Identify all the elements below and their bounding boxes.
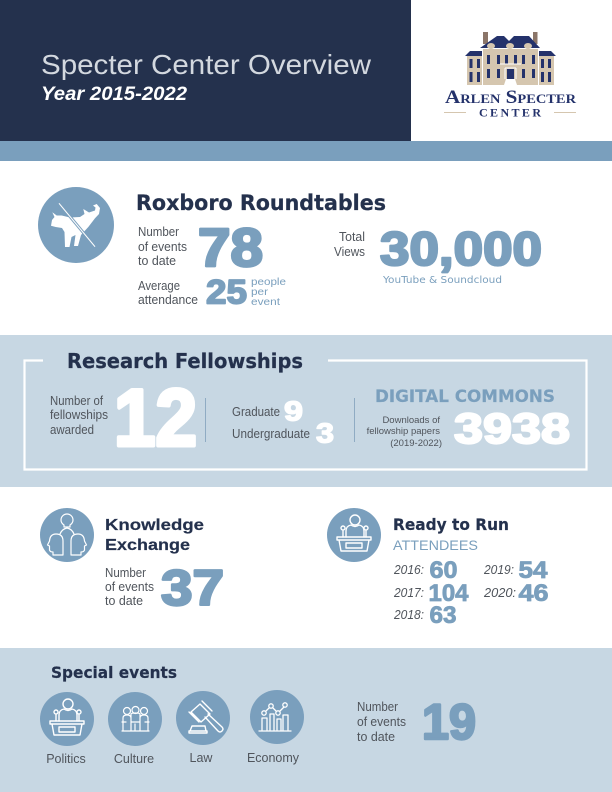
text: people per event: event	[251, 297, 280, 308]
logo: Arlen Specter Center: CENTER	[479, 106, 541, 120]
text: people per event	[251, 277, 287, 308]
text: YouTube and Soundcloud: YouTube & Soundcloud	[382, 275, 502, 286]
attendees by year: 46	[518, 580, 548, 607]
text: number of events: to date	[138, 254, 176, 268]
heading: Knowledge Exchange	[105, 517, 204, 554]
number: 25 attendance: 25	[206, 274, 247, 312]
number: 30,000 views: 30,000	[380, 222, 542, 275]
icon: economy chart	[250, 690, 304, 744]
text: number of fellowships awarded	[50, 394, 108, 437]
text: total views: Total	[339, 230, 365, 244]
text: number of events: Number	[105, 566, 146, 580]
text: number of fellowships awarded: awarded	[50, 423, 94, 437]
number: 19 events: 19	[422, 694, 476, 750]
heading: Roxboro Roundtables: Roxboro Roundtables	[136, 191, 386, 215]
text: total views: Views	[334, 245, 365, 259]
panel: Knowledge Exchange	[40, 508, 224, 616]
text: number of fellowships awarded: fellowships	[50, 408, 108, 422]
heading: Knowledge Exchange: Knowledge	[105, 517, 204, 534]
heading: Knowledge Exchange: Exchange	[105, 537, 190, 554]
heading: Ready to Run: Ready to Run	[393, 515, 509, 534]
text: number of events: of events	[138, 240, 187, 254]
attendees by year: 104	[428, 580, 469, 607]
attendees by year: 2018:	[393, 607, 424, 622]
logo: Arlen Specter Center: Arlen Specter	[445, 87, 577, 108]
attendees by year: 60	[430, 557, 458, 584]
title: Specter Center Overview	[41, 49, 372, 80]
label: politics: Politics	[46, 752, 86, 766]
text: average attendance	[138, 279, 198, 307]
number: 12 fellowships: 12	[114, 374, 197, 464]
text: number of events: of events	[105, 580, 154, 594]
attendees by year: 2017:	[393, 585, 424, 600]
text: number of events: to date	[105, 594, 143, 608]
text: average attendance: attendance	[138, 293, 198, 307]
text: number of events: of events	[357, 715, 406, 729]
panel: Special events	[0, 648, 612, 792]
text: total views	[334, 230, 365, 259]
label: culture: Culture	[114, 752, 154, 766]
icon: two heads and lightbulb	[40, 508, 94, 562]
text: downloads of fellowship papers: Downloads of	[382, 415, 440, 426]
heading: Special events: Special events	[51, 663, 177, 682]
text: undergraduate: Undergraduate	[232, 427, 310, 441]
number: 78 events: 78	[198, 218, 263, 278]
attendees by year	[393, 557, 548, 629]
subtitle: Year 2015-2022	[41, 84, 187, 105]
text: people per event: people	[251, 277, 287, 288]
top accent band	[0, 141, 612, 161]
text: people per event: per	[251, 287, 269, 298]
text: number of events	[138, 225, 187, 268]
text: average attendance: Average	[138, 279, 180, 293]
header panel	[0, 0, 411, 141]
text: number of events	[105, 566, 154, 608]
heading: Research Fellowships: Research Fellowships	[67, 349, 303, 373]
number: 9 graduate: 9	[284, 396, 303, 426]
text: graduate: Graduate	[232, 405, 280, 419]
text: number of events: Number	[357, 700, 398, 714]
number: 3938 downloads: 3938	[454, 405, 570, 453]
text: downloads of fellowship papers	[367, 415, 442, 449]
icon: law gavel	[176, 691, 230, 745]
number: 37 events: 37	[161, 560, 224, 616]
icon: culture	[108, 692, 162, 746]
text: downloads of fellowship papers: (2019-2022)	[390, 438, 442, 449]
attendees by year: 2019:	[483, 562, 514, 577]
text: number of fellowships awarded: Number of	[50, 394, 103, 408]
subheading: attendees: ATTENDEES	[393, 537, 478, 553]
panel: Research Fellowships	[0, 335, 612, 487]
icon: crossed-out donkey	[38, 187, 114, 263]
icon: politics	[40, 692, 94, 746]
text: downloads of fellowship papers: fellowship papers	[367, 426, 440, 437]
label: law: Law	[190, 751, 213, 765]
attendees by year: 63	[430, 602, 456, 629]
text: number of events: Number	[138, 225, 179, 239]
icon: speaker at podium	[327, 508, 381, 562]
heading: Digital Commons: DIGITAL COMMONS	[375, 387, 555, 407]
text: number of events	[357, 700, 406, 744]
attendees by year: 2020:	[483, 585, 516, 600]
panel: Ready to Run	[327, 508, 548, 629]
logo: Arlen Specter Center	[444, 32, 577, 120]
attendees by year: 54	[518, 557, 548, 584]
panel: Roxboro Roundtables	[38, 187, 542, 312]
text: number of events: to date	[357, 730, 395, 744]
label: economy: Economy	[247, 751, 300, 765]
number: 3 undergraduate: 3	[316, 418, 334, 448]
attendees by year: 2016:	[393, 562, 424, 577]
